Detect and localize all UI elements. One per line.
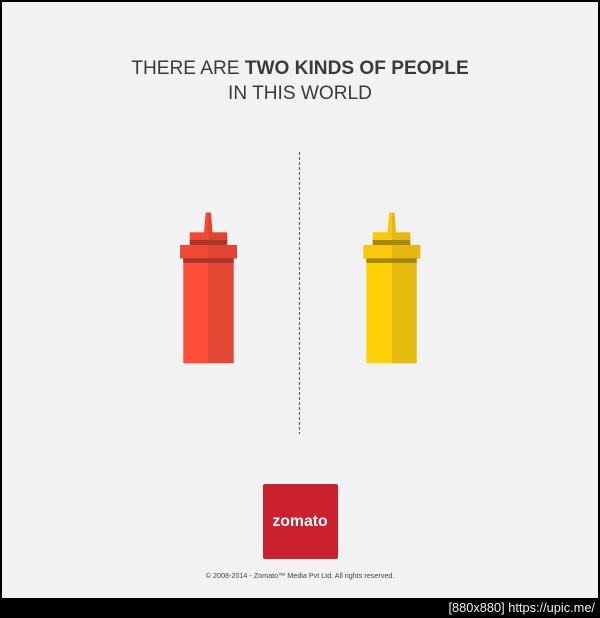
icon: ketchup bottle [180, 212, 237, 364]
logo text: zomato [272, 513, 328, 530]
divider: dashed line [298, 152, 300, 434]
icon: mustard bottle [363, 212, 420, 364]
title [131, 58, 469, 104]
title: THERE ARE TWO KINDS OF PEOPLE [131, 58, 469, 79]
title: IN THIS WORLD [228, 82, 372, 104]
watermark: [880x880] https://upic.me/ [448, 600, 595, 615]
copyright: © 2008-2014 - Zomato™ Media Pvt Ltd. All rights reserved. [206, 571, 394, 580]
logo: zomato [262, 484, 338, 558]
